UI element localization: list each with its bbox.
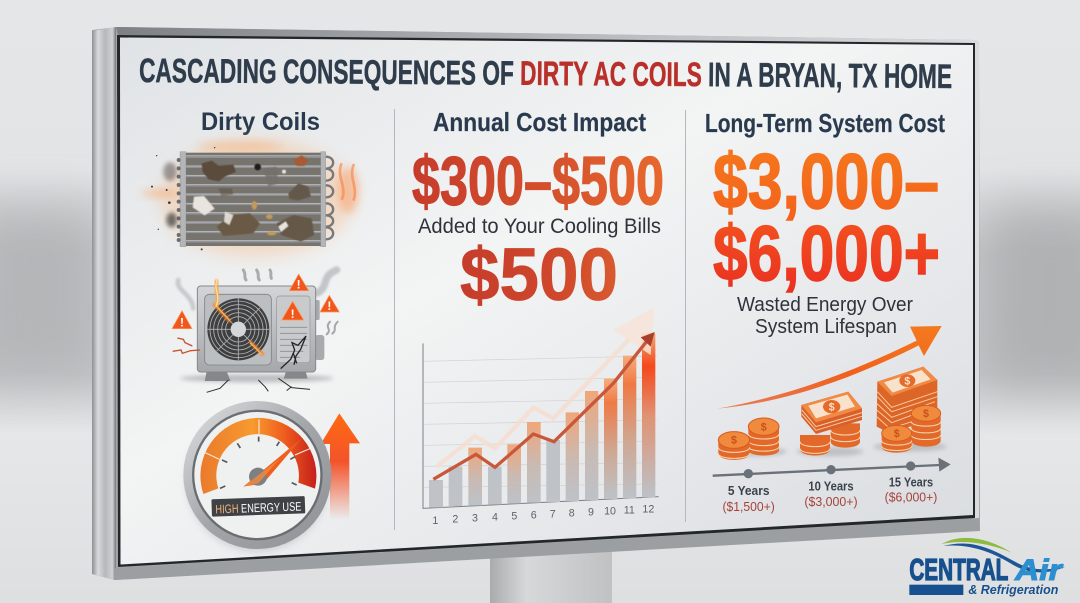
logo: Central Air and Refrigeration: & Refrigeration	[968, 583, 1059, 597]
15 year cash and coins	[877, 367, 941, 453]
bar chart with rising arrows: 6	[531, 510, 537, 522]
logo: Central Air and Refrigeration	[909, 538, 1065, 597]
money stacks and timeline	[713, 367, 951, 514]
bar chart with rising arrows: 9	[588, 506, 594, 518]
bar chart with rising arrows: 8	[569, 507, 575, 519]
bar chart with rising arrows: 10	[604, 505, 616, 517]
monitor stand	[490, 550, 612, 603]
panel: long-term system cost	[705, 108, 951, 514]
icon: failing outdoor AC unit: !	[297, 278, 301, 292]
heading: long-term system cost: Long-Term System Cost	[705, 108, 945, 138]
text: wasted energy over system lifespan: System Lifespan	[755, 315, 897, 338]
icon: energy gauge with up arrow	[183, 401, 360, 551]
logo: Central Air and Refrigeration: Air	[1014, 554, 1064, 587]
heading: dirty coils: Dirty Coils	[201, 108, 320, 136]
timeline labels: ($1,500+)	[722, 499, 775, 514]
15 year cash and coins: $	[904, 376, 910, 388]
bar chart with rising arrows	[423, 307, 659, 527]
timeline labels: 10 Years	[808, 478, 854, 493]
title: CASCADING CONSEQUENCES OF DIRTY AC COILS IN A BRYAN, TX HOME	[139, 52, 952, 96]
column dividers	[394, 109, 686, 530]
bar chart with rising arrows: 3	[472, 512, 478, 524]
text: wasted energy over system lifespan: Wasted Energy Over	[737, 293, 913, 316]
bar chart with rising arrows: 1	[432, 515, 438, 527]
icon: failing outdoor AC unit: !	[327, 299, 331, 313]
bar chart with rising arrows: 2	[452, 514, 458, 526]
monitor frame	[92, 27, 980, 580]
timeline labels	[722, 475, 937, 514]
bar chart with rising arrows: 12	[642, 504, 654, 516]
timeline labels: 5 Years	[728, 483, 769, 498]
stat: 300 to 500: $300–$500	[412, 142, 664, 220]
icon: dirty condenser coil	[142, 140, 359, 257]
stat: 500: $500	[460, 233, 618, 316]
10 year cash and coins	[800, 392, 862, 455]
timeline labels: ($6,000+)	[885, 490, 937, 505]
stat: 3000: $3,000–	[713, 137, 939, 225]
screen panel	[120, 38, 973, 564]
stat: 6000 plus: $6,000+	[713, 209, 940, 297]
timeline labels: ($3,000+)	[804, 494, 858, 509]
15 year cash and coins: $	[894, 428, 900, 440]
icon: energy gauge with up arrow: HIGH ENERGY USE	[215, 500, 302, 516]
icon: failing outdoor AC unit: !	[291, 307, 295, 321]
logo: Central Air and Refrigeration: CENTRAL	[909, 552, 1008, 587]
5 year coins: $	[761, 421, 767, 433]
text: added to cooling bills: Added to Your Cooling Bills	[418, 214, 661, 238]
10 year cash and coins: $	[829, 402, 835, 414]
heading: annual cost impact: Annual Cost Impact	[433, 107, 646, 137]
icon: failing outdoor AC unit	[172, 270, 339, 392]
5 year coins	[718, 418, 779, 460]
text: wasted energy over system lifespan	[737, 293, 913, 338]
5 year coins: $	[731, 435, 737, 447]
timeline arrow	[713, 458, 951, 478]
bar chart with rising arrows: 4	[492, 512, 498, 524]
rising cost arrow	[717, 326, 942, 409]
bar chart with rising arrows: 11	[624, 504, 635, 516]
timeline labels: 15 Years	[889, 475, 933, 490]
icon: failing outdoor AC unit: !	[180, 316, 184, 330]
bar chart with rising arrows: 7	[550, 509, 556, 521]
15 year cash and coins: $	[923, 408, 929, 420]
bar chart with rising arrows: 5	[511, 511, 517, 523]
panel: dirty coils	[142, 108, 360, 551]
panel: annual cost impact	[412, 107, 664, 527]
